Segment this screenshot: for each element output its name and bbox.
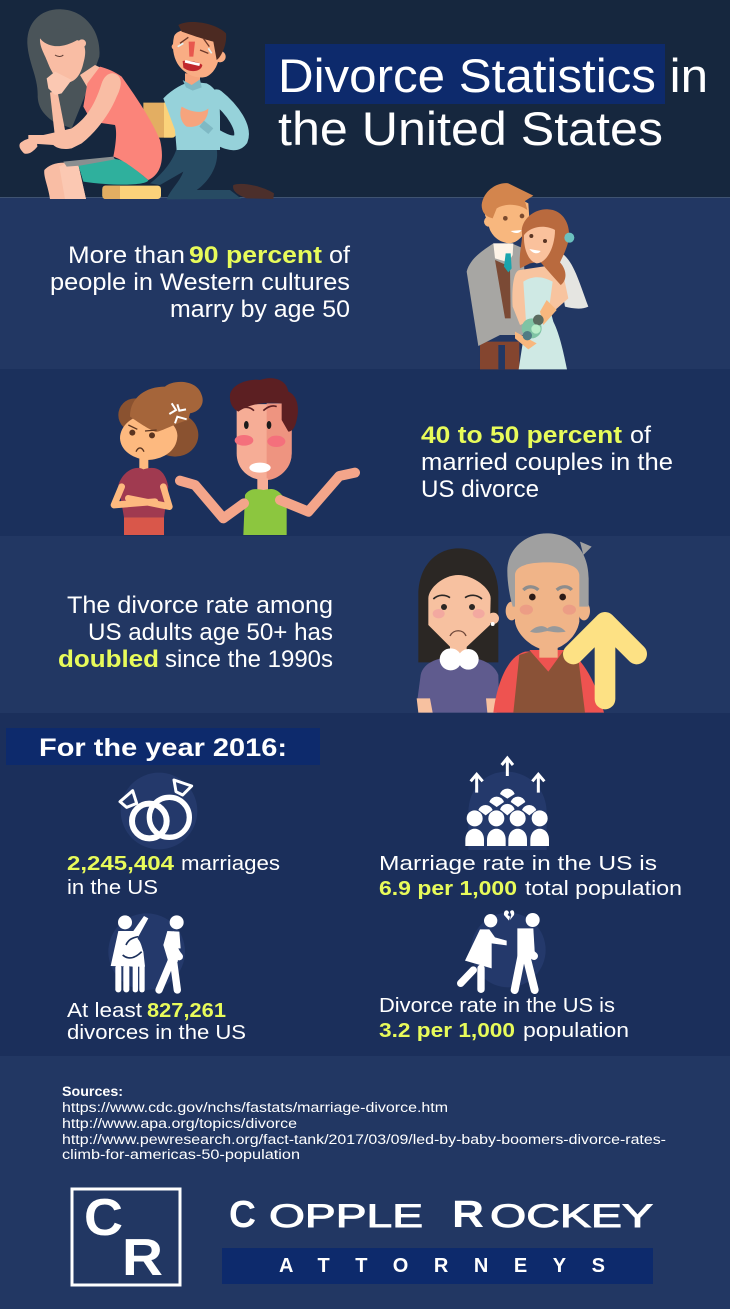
text: 40 to 50 percent divorce: of xyxy=(630,422,651,449)
text: 90 percent marry: 90 percent xyxy=(189,242,322,269)
title xyxy=(278,49,708,155)
text: 40 to 50 percent divorce xyxy=(421,422,673,503)
logo: attorneys banner xyxy=(222,1248,653,1284)
heading highlight: for the year 2016 xyxy=(6,728,320,765)
icon: family and man walking away xyxy=(108,913,185,992)
logo: Copple Rockey wordmark xyxy=(229,1194,653,1236)
logo: CR monogram: C xyxy=(84,1189,123,1247)
text: marriage rate: 6.9 per 1,000 xyxy=(379,877,517,900)
logo: Copple Rockey wordmark: OCKEY xyxy=(490,1198,653,1234)
text: 40 to 50 percent divorce: married couples in the xyxy=(421,449,673,476)
text: 90 percent marry xyxy=(50,242,350,323)
text: 40 to 50 percent divorce: 40 to 50 percent xyxy=(421,422,622,449)
text: doubled since 1990s: doubled xyxy=(58,646,159,673)
text: sources xyxy=(62,1084,666,1162)
text: sources: Sources: xyxy=(62,1084,123,1099)
text: divorce rate xyxy=(379,994,629,1042)
text: 90 percent marry: More than xyxy=(68,242,185,269)
heading: for the year 2016: For the year 2016: xyxy=(39,734,287,762)
text: sources: climb-for-americas-50-population xyxy=(62,1147,300,1162)
text: divorce rate: 3.2 per 1,000 xyxy=(379,1019,515,1042)
illustration: arguing couple xyxy=(114,378,355,535)
text: divorces count: At least xyxy=(67,999,142,1022)
text: marriages count: in the US xyxy=(67,876,158,899)
text: divorces count: divorces in the US xyxy=(67,1021,246,1044)
panel: doubled statistic background xyxy=(0,536,730,713)
text: doubled since 1990s: The divorce rate among xyxy=(67,592,333,619)
text: marriage rate xyxy=(379,852,682,900)
text: divorce rate: population xyxy=(523,1019,629,1042)
text: divorces count: 827,261 xyxy=(147,999,226,1022)
icon: woman reaching toward man with broken heart xyxy=(461,910,546,990)
illustration: wedding couple xyxy=(467,183,588,369)
icon: crowd with rising arrows xyxy=(465,758,549,850)
illustration: older couple with rising arrow xyxy=(417,533,637,713)
logo: attorneys banner: ATTORNEYS xyxy=(279,1255,605,1277)
title: Divorce Statistics in xyxy=(278,49,708,102)
text: divorces count xyxy=(67,999,246,1044)
panel: sources and logo background xyxy=(0,1056,730,1309)
text: marriages count: 2,245,404 xyxy=(67,852,175,875)
logo: CR monogram: R xyxy=(122,1229,163,1287)
panel: header background xyxy=(0,0,730,197)
text: 90 percent marry: people in Western cultures xyxy=(50,269,350,296)
logo: Copple Rockey wordmark: C xyxy=(229,1194,256,1236)
text: sources: http://www.pewresearch.org/fact-tank/2017/03/09/led-by-baby-boomers-divorce-rates- xyxy=(62,1132,666,1147)
text: 90 percent marry: marry by age 50 xyxy=(170,296,350,323)
icon: wedding rings xyxy=(120,773,197,849)
panel: year 2016 background xyxy=(0,713,730,1056)
illustration: crying couple xyxy=(19,9,274,199)
text: sources: https://www.cdc.gov/nchs/fastats/marriage-divorce.htm xyxy=(62,1100,448,1115)
logo: CR monogram xyxy=(72,1189,180,1287)
title highlight xyxy=(265,44,665,104)
text: marriages count xyxy=(67,852,280,899)
text: marriages count: marriages xyxy=(181,852,280,875)
panel: divorce statistic background xyxy=(0,369,730,536)
text: 40 to 50 percent divorce: US divorce xyxy=(421,476,539,503)
text: divorce rate: Divorce rate in the US is xyxy=(379,994,615,1017)
text: marriage rate: Marriage rate in the US is xyxy=(379,852,657,875)
panel: marriage statistic background xyxy=(0,197,730,369)
text: doubled since 1990s: US adults age 50+ has xyxy=(88,619,333,646)
logo: Copple Rockey wordmark: OPPLE xyxy=(269,1198,423,1234)
text: 90 percent marry: of xyxy=(329,242,350,269)
text: marriage rate: total population xyxy=(525,877,682,900)
text: doubled since 1990s xyxy=(58,592,333,673)
text: doubled since 1990s: since the 1990s xyxy=(165,646,333,673)
text: sources: http://www.apa.org/topics/divorce xyxy=(62,1116,297,1131)
title: the United States xyxy=(278,102,663,155)
logo: Copple Rockey wordmark: R xyxy=(452,1194,484,1236)
